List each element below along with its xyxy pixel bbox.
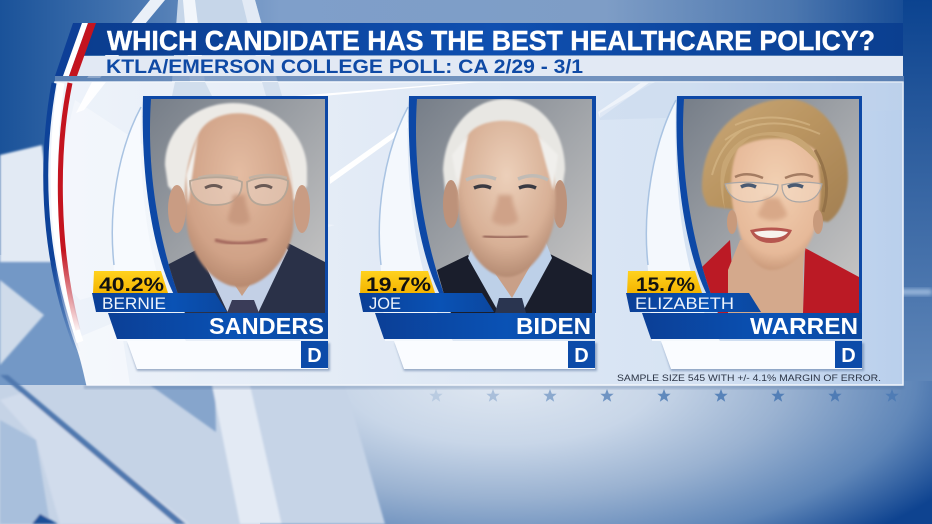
portrait: Biden — [407, 96, 597, 316]
footnote: SAMPLE SIZE 545 WITH +/- 4.1% MARGIN OF ERROR. — [617, 373, 881, 384]
percentage tag — [627, 271, 702, 293]
portrait: Warren — [674, 96, 864, 316]
heading bar — [83, 23, 903, 55]
card: Joe Biden — [359, 96, 597, 369]
percentage: 40.2% — [99, 274, 164, 296]
first name tab — [359, 293, 494, 312]
last name bar — [375, 313, 595, 339]
percentage tag — [93, 271, 168, 293]
row of stars — [429, 389, 899, 402]
party badge — [301, 341, 328, 368]
party badge — [835, 341, 862, 368]
subtitle: KTLA/EMERSON COLLEGE POLL: CA 2/29 - 3/1 — [106, 56, 583, 78]
last name bar — [108, 313, 328, 339]
first name tab — [626, 293, 761, 312]
first name: ELIZABETH — [635, 294, 734, 313]
white party strip — [127, 341, 328, 369]
photo frame — [143, 96, 328, 313]
photo backing arcs — [112, 100, 720, 341]
card: Bernie Sanders — [92, 96, 330, 369]
subheading bar — [70, 56, 903, 76]
main panel — [45, 82, 904, 389]
percentage: 15.7% — [636, 274, 695, 296]
white party strip — [661, 341, 862, 369]
banner stripes — [55, 23, 96, 76]
photo frame — [409, 96, 596, 313]
portrait: Sanders — [150, 99, 325, 313]
first name: BERNIE — [102, 294, 166, 313]
panel glass reflections — [45, 82, 903, 385]
party badge: D — [841, 345, 856, 367]
party badge — [568, 341, 595, 368]
title banner — [55, 23, 904, 81]
percentage: 19.7% — [366, 274, 431, 296]
photo frame — [676, 96, 862, 313]
star shards, upper — [0, 0, 278, 262]
first name tab — [92, 293, 227, 312]
party badge: D — [307, 345, 322, 367]
party badge: D — [574, 345, 589, 367]
last name: SANDERS — [209, 313, 324, 339]
white party strip — [394, 341, 595, 369]
card: Elizabeth Warren — [626, 96, 864, 369]
last name: WARREN — [750, 313, 858, 339]
panel red white blue swoosh — [46, 83, 80, 352]
percentage tag — [360, 271, 435, 293]
last name: BIDEN — [516, 313, 591, 339]
first name: JOE — [369, 294, 401, 313]
star shards, lower left — [0, 280, 385, 524]
last name bar — [642, 313, 862, 339]
title: WHICH CANDIDATE HAS THE BEST HEALTHCARE POLICY? — [107, 25, 875, 56]
